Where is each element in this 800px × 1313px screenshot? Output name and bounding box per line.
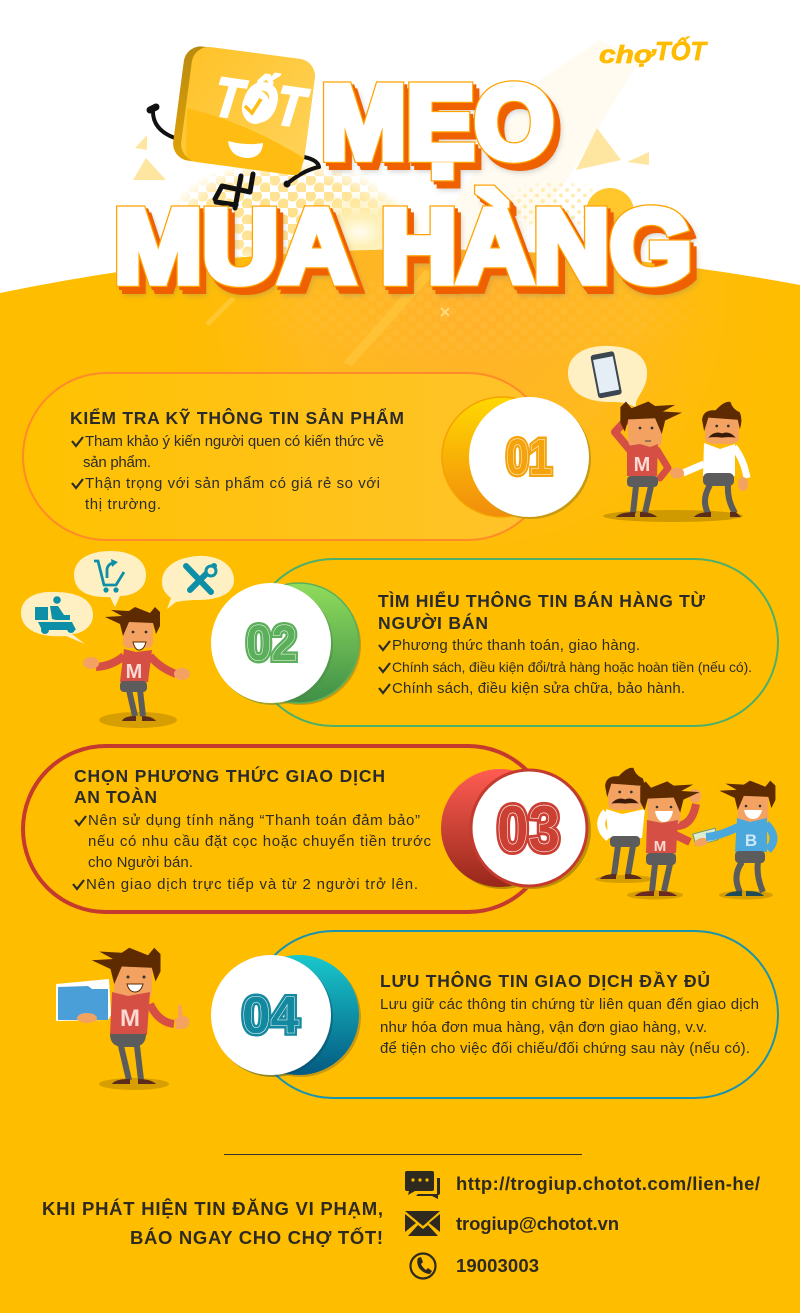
speech bubble: phone xyxy=(568,346,647,408)
man with mustache xyxy=(670,402,748,517)
man M scratching head: M xyxy=(634,454,650,476)
panel 4 heading: LƯU THÔNG TIN GIAO DỊCH ĐẦY ĐỦ xyxy=(380,970,710,991)
panel 3 badge xyxy=(441,769,591,889)
title line 1: MẸO xyxy=(321,65,554,181)
speech bubble: tools xyxy=(162,556,234,609)
panel 1 xyxy=(23,373,591,540)
man B xyxy=(706,781,775,896)
panel 3 body: nếu có nhu cầu đặt cọc hoặc chuyển tiền trước xyxy=(88,833,432,850)
panel 3 heading: CHỌN PHƯƠNG THỨC GIAO DỊCH xyxy=(74,765,385,786)
footer message: BÁO NGAY CHO CHỢ TỐT! xyxy=(130,1227,383,1248)
panel 1 body xyxy=(72,433,384,513)
panel 1 heading: KIỂM TRA KỸ THÔNG TIN SẢN PHẨM xyxy=(70,407,404,428)
panel 1 body: sản phẩm. xyxy=(83,454,151,471)
panel 4 badge xyxy=(211,955,361,1077)
panel 2 xyxy=(211,559,778,726)
title line 2: MUA HÀNG xyxy=(121,198,699,314)
panel 2 body: Chính sách, điều kiện đổi/trả hàng hoặc hoàn tiền (nếu có). xyxy=(392,659,752,675)
panel 4 body xyxy=(380,996,759,1057)
panel 1 body: thị trường. xyxy=(85,496,161,513)
contact: email xyxy=(405,1211,619,1236)
panel 2 heading: NGƯỜI BÁN xyxy=(378,612,488,633)
man M scratching head xyxy=(615,401,682,517)
panel 1 body: Tham khảo ý kiến người quen có kiến thức về xyxy=(85,433,384,450)
brand logo: chợ xyxy=(599,41,657,69)
mascot body xyxy=(171,44,317,176)
panel 2 badge: 02 xyxy=(246,615,297,671)
panel 3 body: Nên giao dịch trực tiếp và từ 2 người trở lên. xyxy=(86,876,418,893)
panel 3 body xyxy=(73,812,432,893)
man M arms open xyxy=(83,607,190,721)
icon: envelope xyxy=(405,1211,440,1236)
panel 4 body: như hóa đơn mua hàng, vận đơn giao hàng, v.v. xyxy=(380,1019,707,1036)
title line 2: MUA HÀNG xyxy=(114,189,692,305)
money xyxy=(692,828,719,848)
contact: email: trogiup@chotot.vn xyxy=(456,1213,619,1234)
panel 2 badge: 02 xyxy=(246,615,297,671)
decorative triangles xyxy=(133,128,649,180)
man M with thumb up: M xyxy=(120,1005,140,1032)
panel 4 outline xyxy=(250,931,778,1098)
panel 1 badge: 01 xyxy=(506,429,552,485)
mascot xyxy=(150,44,319,208)
footer divider xyxy=(224,1154,582,1155)
ground shadow xyxy=(99,712,177,728)
icon: chat xyxy=(405,1171,440,1199)
panel 1 badge: 01 xyxy=(506,429,552,485)
panel 3 heading xyxy=(74,765,385,807)
contact: website: http://trogiup.chotot.com/lien-he/ xyxy=(456,1173,760,1194)
panel 4 badge: 04 xyxy=(242,987,299,1045)
title line 1: MẸO xyxy=(321,65,554,181)
panel 3 outline xyxy=(23,746,551,912)
title line 2: MUA HÀNG xyxy=(117,192,695,308)
panel 2 body xyxy=(379,637,752,697)
illustration 2 xyxy=(21,551,234,728)
panel 3 xyxy=(23,746,591,912)
man M with raised hand xyxy=(635,781,701,896)
man M arms open: M xyxy=(126,661,142,683)
man M with thumb up xyxy=(92,948,189,1084)
footer message xyxy=(42,1198,383,1248)
man B: B xyxy=(745,831,757,850)
panel 2 badge xyxy=(211,583,361,705)
title line 2: MUA HÀNG xyxy=(114,189,692,305)
title line 1: MẸO xyxy=(328,74,561,190)
panel 3 body: Nên sử dụng tính năng “Thanh toán đảm bảo” xyxy=(88,812,420,829)
panel 3 badge: 03 xyxy=(497,792,560,865)
panel 2 body: Chính sách, điều kiện sửa chữa, bảo hành. xyxy=(392,680,685,697)
title xyxy=(114,65,699,314)
illustration 1 xyxy=(568,346,748,522)
panel 2 badge: 02 xyxy=(246,615,297,671)
mascot word: TỐT xyxy=(211,65,312,140)
speech bubble: cart xyxy=(74,551,146,607)
panel 1 badge: 01 xyxy=(506,429,552,485)
brand logo: TỐT xyxy=(655,36,708,66)
panel 4 badge: 04 xyxy=(242,987,299,1045)
mascot limbs xyxy=(150,107,319,208)
contact: phone: 19003003 xyxy=(456,1255,539,1276)
panel 2 heading xyxy=(378,590,705,633)
panel 4 badge: 04 xyxy=(242,987,299,1045)
panel 1 body: Thận trọng với sản phẩm có giá rẻ so với xyxy=(85,475,380,492)
ground shadow xyxy=(603,510,743,522)
folder xyxy=(56,979,111,1023)
panel 3 badge: 03 xyxy=(497,792,560,865)
panel 3 badge: 03 xyxy=(497,792,560,865)
brand logo xyxy=(599,36,708,69)
panel 4 xyxy=(211,931,778,1098)
title line 1: MẸO xyxy=(324,68,557,184)
panel 2 outline xyxy=(250,559,778,726)
title line 1: MẸO xyxy=(327,72,560,188)
illustration 3 xyxy=(595,768,775,900)
speech bubble: delivery xyxy=(21,592,93,644)
panel 2 heading: TÌM HIỂU THÔNG TIN BÁN HÀNG TỪ xyxy=(378,590,705,611)
man with mustache xyxy=(600,768,645,879)
contact: phone xyxy=(410,1254,539,1278)
man M with raised hand: M xyxy=(654,838,666,855)
footer message: KHI PHÁT HIỆN TIN ĐĂNG VI PHẠM, xyxy=(42,1198,383,1219)
ground shadow xyxy=(99,1078,169,1090)
panel 1 outline xyxy=(23,373,551,540)
panel 2 body: Phương thức thanh toán, giao hàng. xyxy=(392,637,640,654)
icon: phone xyxy=(410,1254,436,1278)
panel 4 body: để tiện cho việc đối chiếu/đối chứng sau này (nếu có). xyxy=(380,1040,750,1057)
panel 3 body: cho Người bán. xyxy=(88,854,193,871)
panel 1 badge xyxy=(442,397,591,519)
panel 4 body: Lưu giữ các thông tin chứng từ liên quan đến giao dịch xyxy=(380,996,759,1013)
contact: website xyxy=(405,1171,760,1199)
mascot smile xyxy=(228,141,263,158)
panel 3 heading: AN TOÀN xyxy=(74,786,157,807)
illustration 4 xyxy=(56,948,189,1090)
title line 2: MUA HÀNG xyxy=(120,196,698,312)
ground shadows xyxy=(595,875,773,900)
